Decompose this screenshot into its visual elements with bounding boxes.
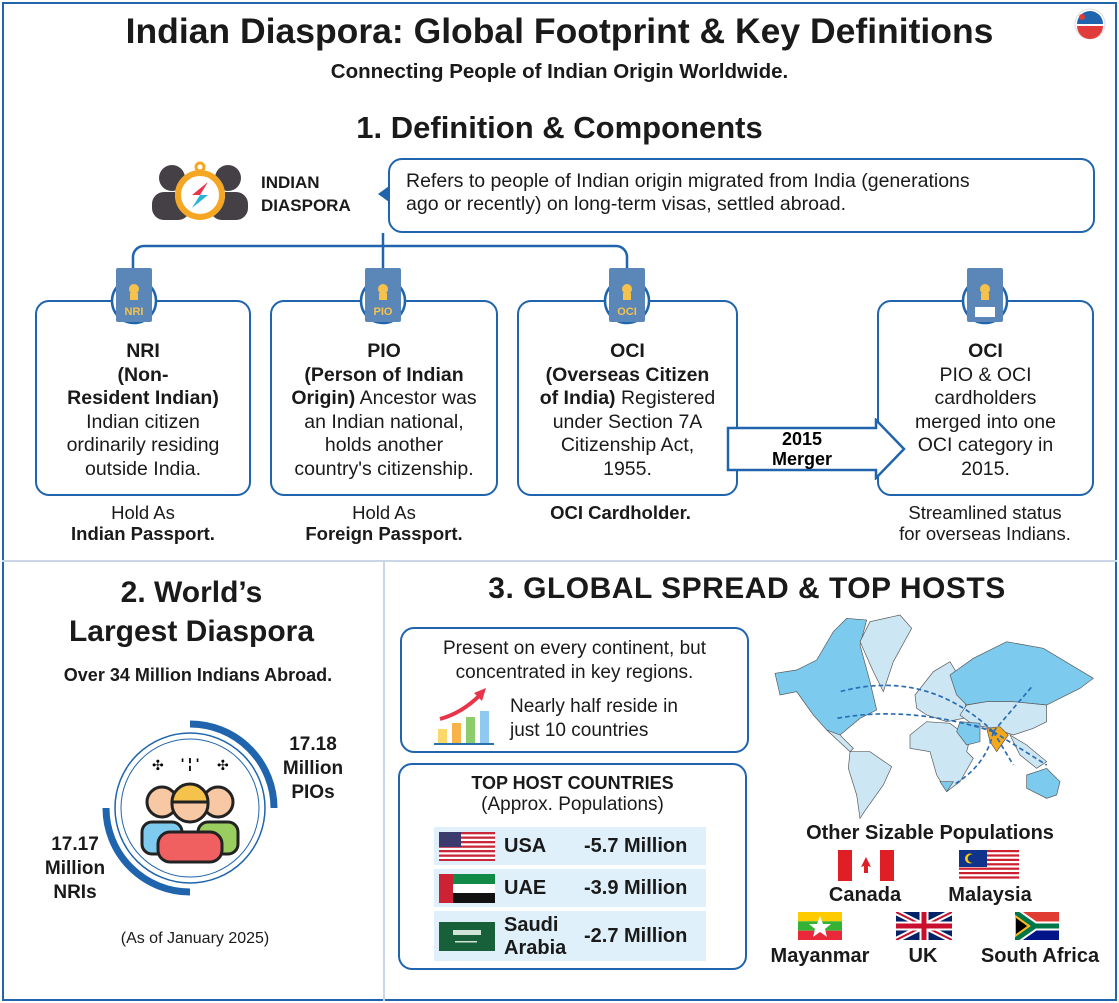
row: UAE (434, 869, 706, 907)
flag: Myanmar: Mayanmar (771, 945, 869, 967)
section 2 heading: Largest Diaspora (69, 615, 314, 648)
section 2 heading: 2. World’s (121, 576, 262, 609)
row: Saudi Arabia: Arabia (504, 937, 566, 959)
panel: OCI merged: OCI category in (918, 434, 1053, 456)
icon: passport PIO (360, 268, 406, 324)
caption: NRI (71, 502, 215, 544)
panel: PIO: (Person of Indian (304, 364, 464, 386)
section 3 heading: 3. GLOBAL SPREAD & TOP HOSTS (488, 572, 1006, 605)
panel: presence (400, 627, 749, 753)
panel: OCI: (Overseas Citizen (546, 364, 709, 386)
section 1 heading: 1. Definition & Components (356, 110, 763, 145)
title: Indian Diaspora: Global Footprint & Key Definitions (126, 11, 993, 51)
connector tree (132, 233, 628, 268)
panel: presence: Present on every continent, but (443, 638, 706, 659)
icon: passport NRI (110, 268, 158, 324)
panel: NRI: (Non- (118, 364, 168, 386)
row: Saudi Arabia (434, 911, 706, 961)
caption: merged: Streamlined status (908, 502, 1062, 523)
caption: merged (899, 502, 1071, 544)
caption: merged: for overseas Indians. (899, 523, 1071, 544)
icon: passport OCI (604, 268, 650, 324)
panel: PIO: Origin) Ancestor was (291, 387, 477, 409)
section divider vertical (383, 562, 385, 1001)
panel: OCI merged: PIO & OCI (939, 364, 1032, 386)
flag: Myanmar (771, 912, 870, 967)
flag: South Africa: South Africa (981, 945, 1099, 967)
section 2 heading (69, 576, 314, 648)
icon: diaspora compass (152, 162, 248, 220)
panel: PIO: PIO (367, 340, 401, 362)
caption: PIO: Foreign Passport. (305, 523, 463, 544)
label: indian diaspora (261, 173, 351, 215)
stat: NRIs (45, 834, 105, 903)
panel: NRI: outside India. (85, 458, 201, 480)
panel: top host countries (398, 763, 747, 970)
callout: definition: ago or recently) on long-term visas, settled abroad. (406, 193, 846, 215)
row: Saudi Arabia: -2.7 Million (584, 925, 687, 947)
panel: OCI: under Section 7A (553, 410, 702, 432)
stat: PIOs: 17.18 (289, 734, 337, 755)
flag: South Africa (981, 912, 1100, 967)
row: USA: -5.7 Million (584, 835, 687, 857)
panel: PIO: an Indian national, (304, 410, 464, 432)
panel: OCI merged: 2015. (961, 458, 1010, 480)
stat: PIOs: Million (283, 758, 343, 779)
stat: NRIs: NRIs (53, 882, 97, 903)
caption: PIO (305, 502, 463, 544)
arrow: 2015 merger (726, 418, 906, 480)
chart: diaspora ring (102, 720, 278, 896)
flag: UK: UK (909, 945, 937, 967)
panel: OCI: of India) Registered (540, 387, 715, 409)
caption: NRI: Hold As (111, 502, 175, 523)
note: date: (As of January 2025) (121, 930, 269, 947)
panel: NRI: NRI (126, 340, 160, 362)
stat: NRIs: Million (45, 858, 105, 879)
flag: Canada (829, 850, 902, 906)
caption: OCI: OCI Cardholder. (550, 502, 691, 523)
row: USA: USA (504, 835, 546, 857)
stat: PIOs (283, 734, 343, 803)
icon: passport OCI: OCI (617, 306, 637, 318)
arrow: 2015 merger: 2015 (782, 429, 822, 449)
label: indian diaspora: DIASPORA (261, 196, 351, 215)
panel: top host countries: TOP HOST COUNTRIES (471, 773, 674, 793)
logo (1074, 8, 1106, 40)
stat: PIOs: PIOs (291, 782, 335, 803)
panel: OCI merged: OCI (968, 340, 1003, 362)
row: USA (434, 827, 706, 865)
caption: NRI: Indian Passport. (71, 523, 215, 544)
chart: diaspora ring: ✣ (152, 757, 164, 773)
stat: NRIs: 17.17 (51, 834, 99, 855)
panel: presence: concentrated in key regions. (456, 662, 693, 683)
panel: NRI: Indian citizen (86, 410, 200, 432)
panel: NRI: Resident Indian) (67, 387, 219, 409)
panel: PIO: country's citizenship. (294, 458, 474, 480)
panel: OCI (517, 300, 738, 496)
label: indian diaspora: INDIAN (261, 173, 320, 192)
panel: NRI: ordinarily residing (67, 434, 219, 456)
row: Saudi Arabia: Saudi (504, 914, 558, 936)
panel: PIO: holds another (325, 434, 443, 456)
icon: passport NRI: NRI (125, 306, 143, 318)
flag: Malaysia (948, 850, 1032, 906)
panel: top host countries: (Approx. Populations) (481, 794, 664, 815)
caption: PIO: Hold As (352, 502, 416, 523)
callout pointer (378, 186, 389, 202)
panel: OCI merged (877, 300, 1094, 496)
chart: diaspora ring: ' ¦ ' (181, 755, 199, 771)
panel: OCI: Citizenship Act, (561, 434, 694, 456)
section divider horizontal (2, 560, 1117, 562)
stat: total: Over 34 Million Indians Abroad. (64, 665, 332, 685)
panel: OCI merged: cardholders (935, 387, 1036, 409)
flag: Malaysia: Malaysia (948, 884, 1032, 906)
icon: growth chart (434, 688, 494, 745)
panel: presence: Nearly half reside in (510, 696, 678, 717)
flag: UK (896, 912, 952, 967)
row: UAE: -3.9 Million (584, 877, 687, 899)
other sizable populations heading: Other Sizable Populations (806, 822, 1054, 844)
panel: presence: just 10 countries (510, 720, 648, 741)
callout: definition: Refers to people of Indian origin migrated from India (generations (406, 170, 970, 192)
arrow: 2015 merger: Merger (772, 449, 832, 469)
chart: diaspora ring: ✣ (217, 757, 229, 773)
subtitle: Connecting People of Indian Origin Worldwide. (331, 60, 788, 83)
icon: passport OCI card (962, 268, 1008, 324)
panel: OCI: OCI (610, 340, 645, 362)
panel: PIO (270, 300, 498, 496)
panel: OCI merged: merged into one (915, 410, 1056, 432)
panel: NRI (35, 300, 251, 496)
callout: definition (388, 158, 1095, 233)
panel: OCI: 1955. (603, 458, 652, 480)
world map (774, 614, 1094, 820)
row: UAE: UAE (504, 877, 546, 899)
icon: passport PIO: PIO (374, 306, 393, 318)
flag: Canada: Canada (829, 884, 901, 906)
